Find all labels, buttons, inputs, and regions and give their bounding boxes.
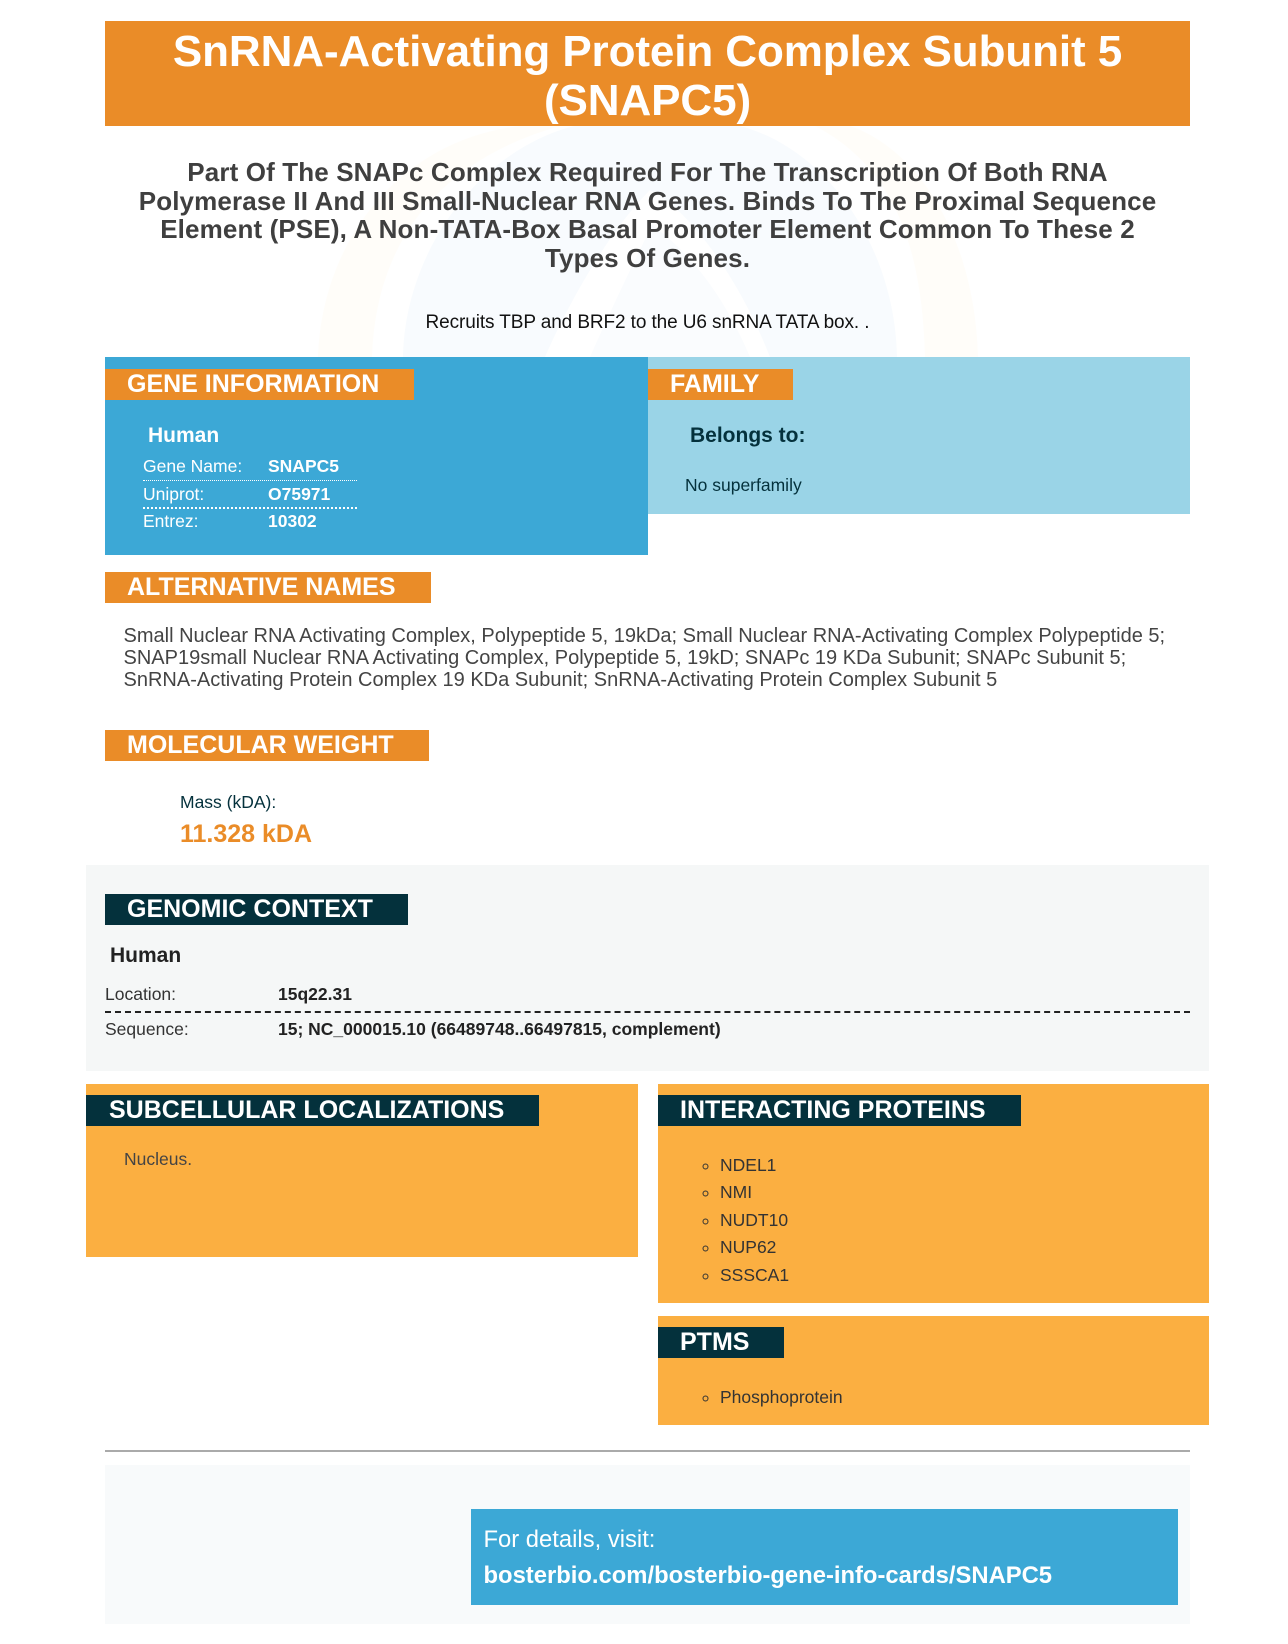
sequence row: Sequence: xyxy=(105,1019,189,1039)
alternative names text: Small Nuclear RNA Activating Complex, Polypeptide 5, 19kDa; Small Nuclear RNA-Activating Complex Polypeptide 5; xyxy=(124,625,1165,647)
heading: gene information: GENE INFORMATION xyxy=(127,370,379,398)
heading: family: FAMILY xyxy=(670,370,759,398)
species label: Human xyxy=(148,424,219,447)
uniprot row: O75971 xyxy=(268,484,330,504)
protein list: NMI xyxy=(720,1182,752,1202)
alternative names text: SNAP19small Nuclear RNA Activating Complex, Polypeptide 5, 19kD; SNAPc 19 KDa Subunit; SNAPc Subunit 5; xyxy=(124,647,1126,669)
protein list xyxy=(702,1155,789,1285)
entrez row: Entrez: xyxy=(143,511,198,531)
protein list: NDEL1 xyxy=(720,1155,776,1175)
heading: molecular weight: MOLECULAR WEIGHT xyxy=(127,731,394,759)
heading: family xyxy=(648,369,793,400)
protein list: NUP62 xyxy=(720,1237,776,1257)
mass label: Mass (kDA): xyxy=(180,792,276,812)
subtitle xyxy=(139,157,1156,273)
family value: No superfamily xyxy=(685,475,802,495)
panel: genomic context xyxy=(86,865,1209,1071)
subtitle: Types Of Genes. xyxy=(545,243,750,273)
species label: Human xyxy=(110,944,181,967)
gene name row xyxy=(143,455,357,481)
footer panel xyxy=(105,1465,1190,1624)
location row xyxy=(105,982,1190,1013)
panel: gene information xyxy=(105,357,648,555)
title banner: SnRNA-Activating Protein Complex Subunit 5 xyxy=(173,27,1122,76)
belongs to label: Belongs to: xyxy=(690,424,806,447)
sequence row: 15; NC_000015.10 (66489748..66497815, complement) xyxy=(278,1019,721,1039)
heading: interacting proteins: INTERACTING PROTEINS xyxy=(680,1096,986,1124)
background watermark logo xyxy=(0,0,1288,360)
panel: family xyxy=(648,357,1190,514)
mass value: 11.328 kDA xyxy=(180,820,312,848)
localization text: Nucleus. xyxy=(124,1149,192,1169)
panel: ptms xyxy=(658,1316,1209,1425)
heading: ptms: PTMS xyxy=(680,1328,749,1356)
subtitle: Part Of The SNAPc Complex Required For The Transcription Of Both RNA xyxy=(187,157,1108,187)
heading: ptms xyxy=(658,1327,784,1358)
description: Recruits TBP and BRF2 to the U6 snRNA TATA box. . xyxy=(426,312,869,333)
entrez row xyxy=(143,511,317,531)
panel: interacting proteins xyxy=(658,1084,1209,1303)
heading: alternative names: ALTERNATIVE NAMES xyxy=(127,573,396,601)
protein list: SSSCA1 xyxy=(720,1265,789,1285)
title banner: (SNAPC5) xyxy=(544,76,751,125)
alternative names text xyxy=(124,625,1165,691)
visit label: For details, visit: xyxy=(484,1526,655,1553)
panel: subcellular localizations xyxy=(86,1084,638,1257)
subtitle: Polymerase II And III Small-Nuclear RNA Genes. Binds To The Proximal Sequence xyxy=(139,186,1156,216)
gene name row: SNAPC5 xyxy=(268,456,339,476)
alternative names text: SnRNA-Activating Protein Complex 19 KDa Subunit; SnRNA-Activating Protein Complex Subunit 5 xyxy=(124,669,997,691)
gene name row: Gene Name: xyxy=(143,456,242,476)
uniprot row: Uniprot: xyxy=(143,484,204,504)
heading: genomic context: GENOMIC CONTEXT xyxy=(127,895,373,923)
heading: subcellular localizations: SUBCELLULAR LOCALIZATIONS xyxy=(109,1096,504,1124)
uniprot row xyxy=(143,482,357,509)
call to action box xyxy=(471,1509,1178,1605)
ptm list: Phosphoprotein xyxy=(720,1387,843,1407)
location row: Location: xyxy=(105,984,176,1004)
entrez row: 10302 xyxy=(268,511,317,531)
url: bosterbio.com/bosterbio-gene-info-cards/SNAPC5 xyxy=(484,1562,1052,1589)
location row: 15q22.31 xyxy=(278,984,352,1004)
title banner xyxy=(105,21,1190,126)
subtitle: Element (PSE), A Non-TATA-Box Basal Promoter Element Common To These 2 xyxy=(160,214,1135,244)
protein list: NUDT10 xyxy=(720,1210,788,1230)
